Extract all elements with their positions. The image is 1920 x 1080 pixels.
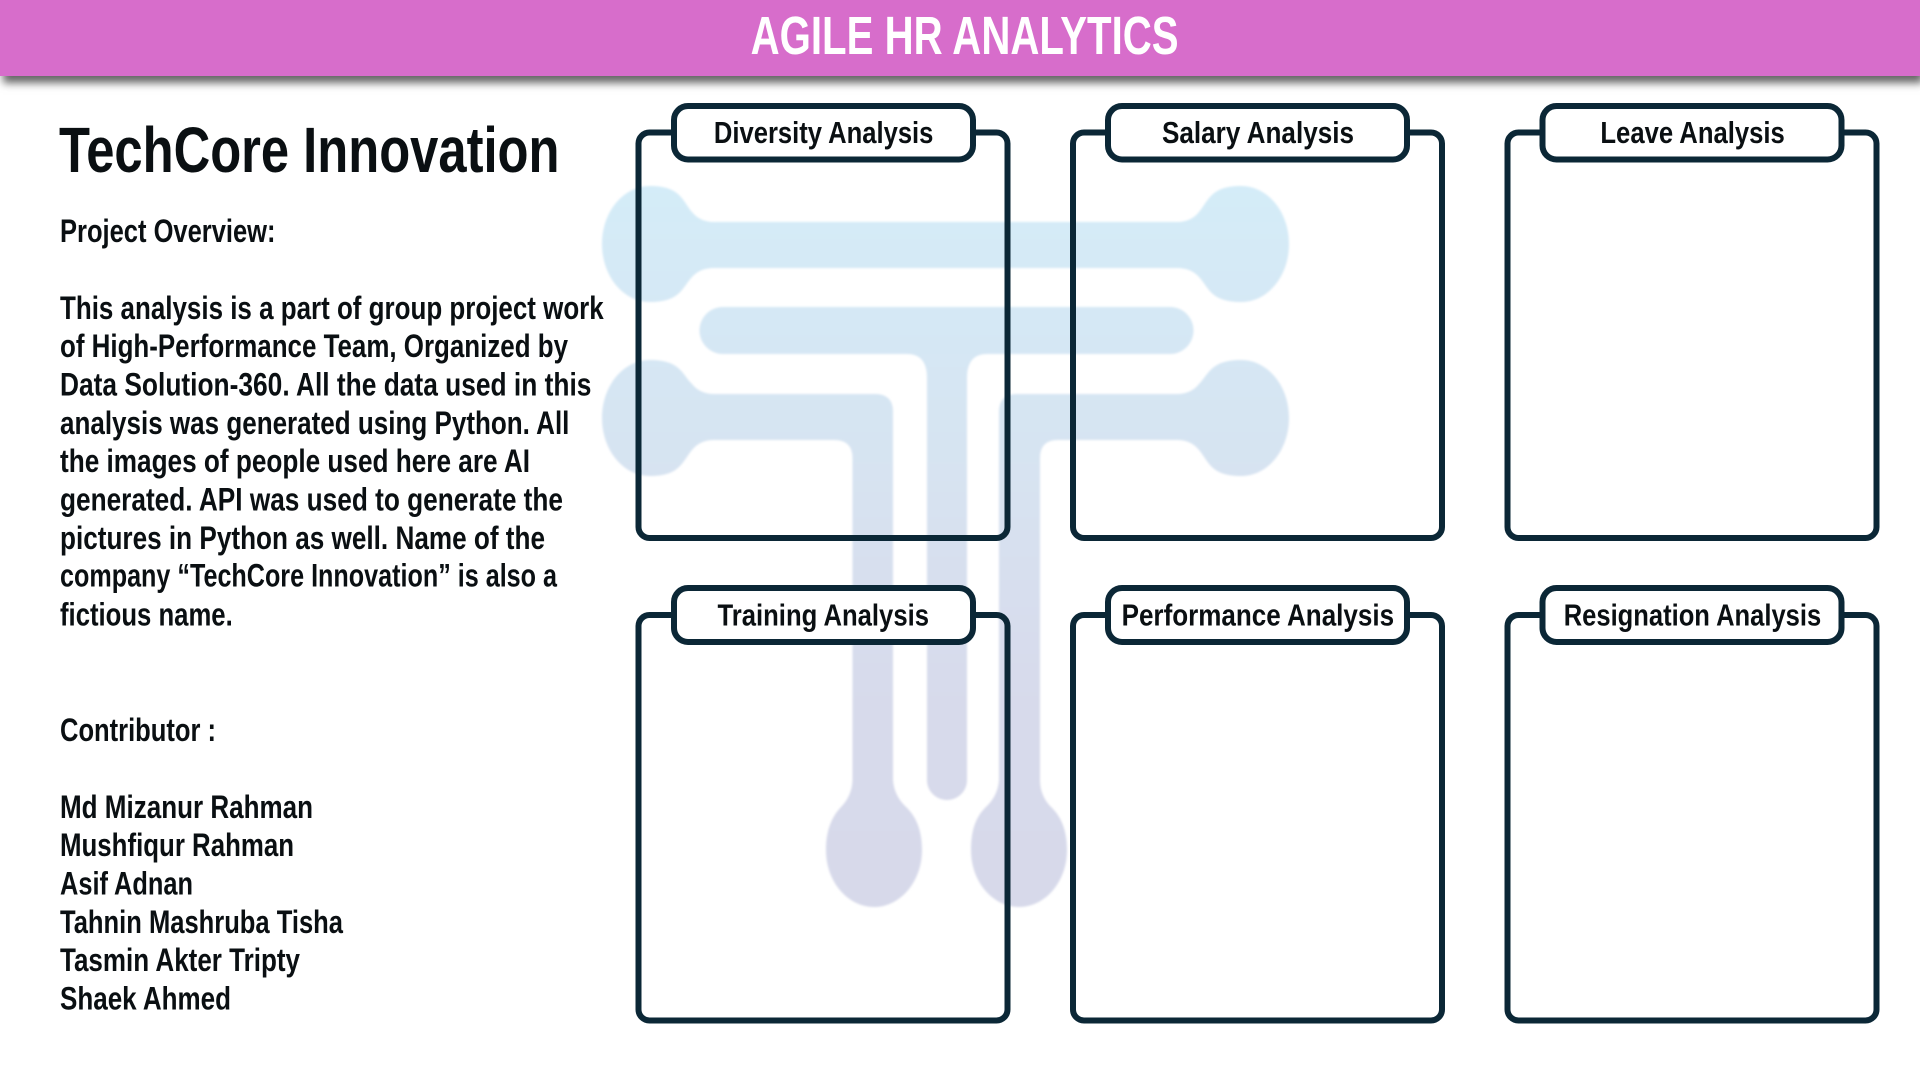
header banner: [0, 0, 1920, 76]
project overview text: [60, 290, 604, 633]
panel: salary analysis: [1073, 106, 1442, 538]
contributor list: Mushfiqur Rahman: [60, 827, 294, 863]
project overview heading: Project Overview:: [60, 213, 276, 249]
panel: diversity analysis: [638, 106, 1008, 538]
watermark logo: [602, 186, 1289, 907]
panel: training analysis: Training Analysis: [718, 598, 929, 632]
project overview text: pictures in Python as well. Name of the: [60, 520, 545, 556]
contributor list: [60, 789, 343, 1017]
contributor list: Tasmin Akter Tripty: [60, 942, 300, 978]
project overview text: of High-Performance Team, Organized by: [60, 328, 568, 364]
company heading: TechCore Innovation: [59, 114, 560, 186]
project overview text: analysis was generated using Python. All: [60, 405, 569, 441]
panel: performance analysis: Performance Analysis: [1122, 598, 1394, 632]
panel: diversity analysis: Diversity Analysis: [714, 115, 933, 150]
panel: leave analysis: [1508, 106, 1876, 538]
panel: training analysis: [638, 588, 1008, 1020]
contributor heading: Contributor :: [60, 712, 216, 748]
project overview text: company “TechCore Innovation” is also a: [60, 558, 557, 594]
project overview text: This analysis is a part of group project work: [60, 290, 604, 326]
panel: resignation analysis: [1508, 588, 1876, 1020]
panel: resignation analysis: Resignation Analysis: [1564, 598, 1821, 632]
panel: leave analysis: Leave Analysis: [1600, 115, 1785, 150]
contributor list: Md Mizanur Rahman: [60, 789, 313, 825]
contributor list: Shaek Ahmed: [60, 981, 231, 1017]
project overview text: fictious name.: [60, 597, 233, 633]
project overview text: the images of people used here are AI: [60, 443, 530, 479]
project overview text: generated. API was used to generate the: [60, 482, 563, 518]
project overview text: Data Solution-360. All the data used in this: [60, 366, 591, 402]
panel: salary analysis: Salary Analysis: [1162, 115, 1354, 150]
contributor list: Asif Adnan: [60, 866, 193, 902]
contributor list: Tahnin Mashruba Tisha: [60, 904, 343, 940]
header title: AGILE HR ANALYTICS: [751, 6, 1179, 66]
panel: performance analysis: [1073, 588, 1442, 1020]
